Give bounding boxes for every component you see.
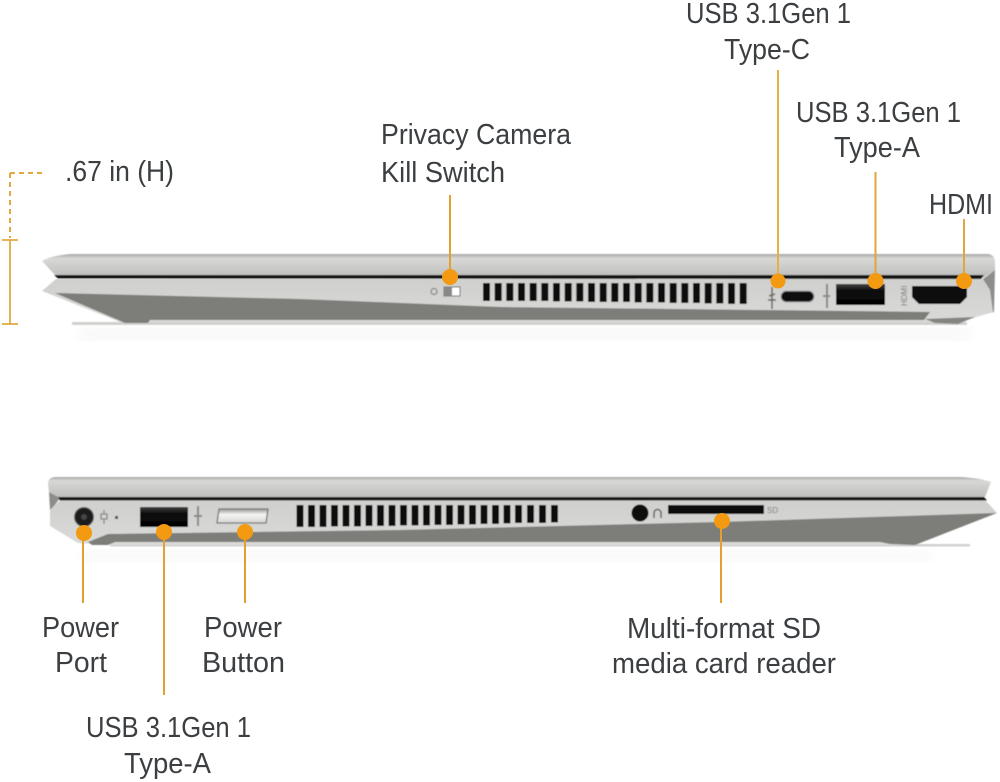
callout: sd card reader: media card reader [612,648,836,680]
lid [48,477,991,498]
hinge gap [58,497,987,500]
headphone jack [632,504,648,522]
laptop: top side view [42,254,995,340]
power marking [101,510,107,524]
camera switch [431,287,460,296]
callout: power port [42,525,119,679]
shadow [80,328,970,340]
callout: privacy camera kill switch: Kill Switch [381,157,505,189]
height label: .67 in (H) [65,156,174,188]
usb-c symbol [768,287,776,309]
callout: power port: Power [42,612,119,644]
hinge gap [54,275,984,279]
callout: sd card reader [612,513,836,680]
callout: power button: Power [204,612,282,644]
usb-a port [836,284,885,305]
callout: usb type-c [686,0,851,288]
usb-a marking [823,284,830,308]
height dimension [2,173,46,324]
power port [74,508,94,526]
callout: sd card reader: Multi-format SD [627,613,821,645]
sd slot [668,505,764,514]
base dark underside [55,293,930,323]
vents [296,505,558,527]
callout: privacy camera kill switch [381,119,571,285]
callout: usb type-a right: USB 3.1Gen 1 [796,97,961,129]
callout: usb type-a right: Type-A [834,132,920,164]
headphone icon [654,510,661,518]
left edge bevel [49,492,60,510]
callout: usb type-a left [86,524,251,780]
callout: power button [202,524,285,679]
sd label: SD [767,506,778,515]
hdmi port [912,286,967,304]
right foot [925,317,975,324]
callout: power port: Port [55,647,107,679]
callout: hdmi [929,189,993,289]
vents [483,283,747,304]
shadow [80,550,930,562]
power button [217,509,268,523]
hdmi label: HDMI [900,286,909,306]
callout: usb type-c: Type-C [724,34,810,66]
callout: privacy camera kill switch: Privacy Camera [381,119,571,151]
base light [50,500,997,545]
usb-a marking [194,506,202,526]
callout: usb type-a left: Type-A [124,748,211,780]
callout: hdmi: HDMI [929,189,993,221]
usb-a port [140,507,188,527]
right edge bevel [983,270,995,314]
base dark underside [88,513,997,545]
callout: power button: Button [202,647,285,679]
laptop: bottom side view [48,477,997,562]
base light [42,279,993,322]
callout: usb type-a right [796,97,961,289]
usb-c port [781,291,814,302]
callout: usb type-a left: USB 3.1Gen 1 [86,712,251,744]
lid [42,254,995,278]
